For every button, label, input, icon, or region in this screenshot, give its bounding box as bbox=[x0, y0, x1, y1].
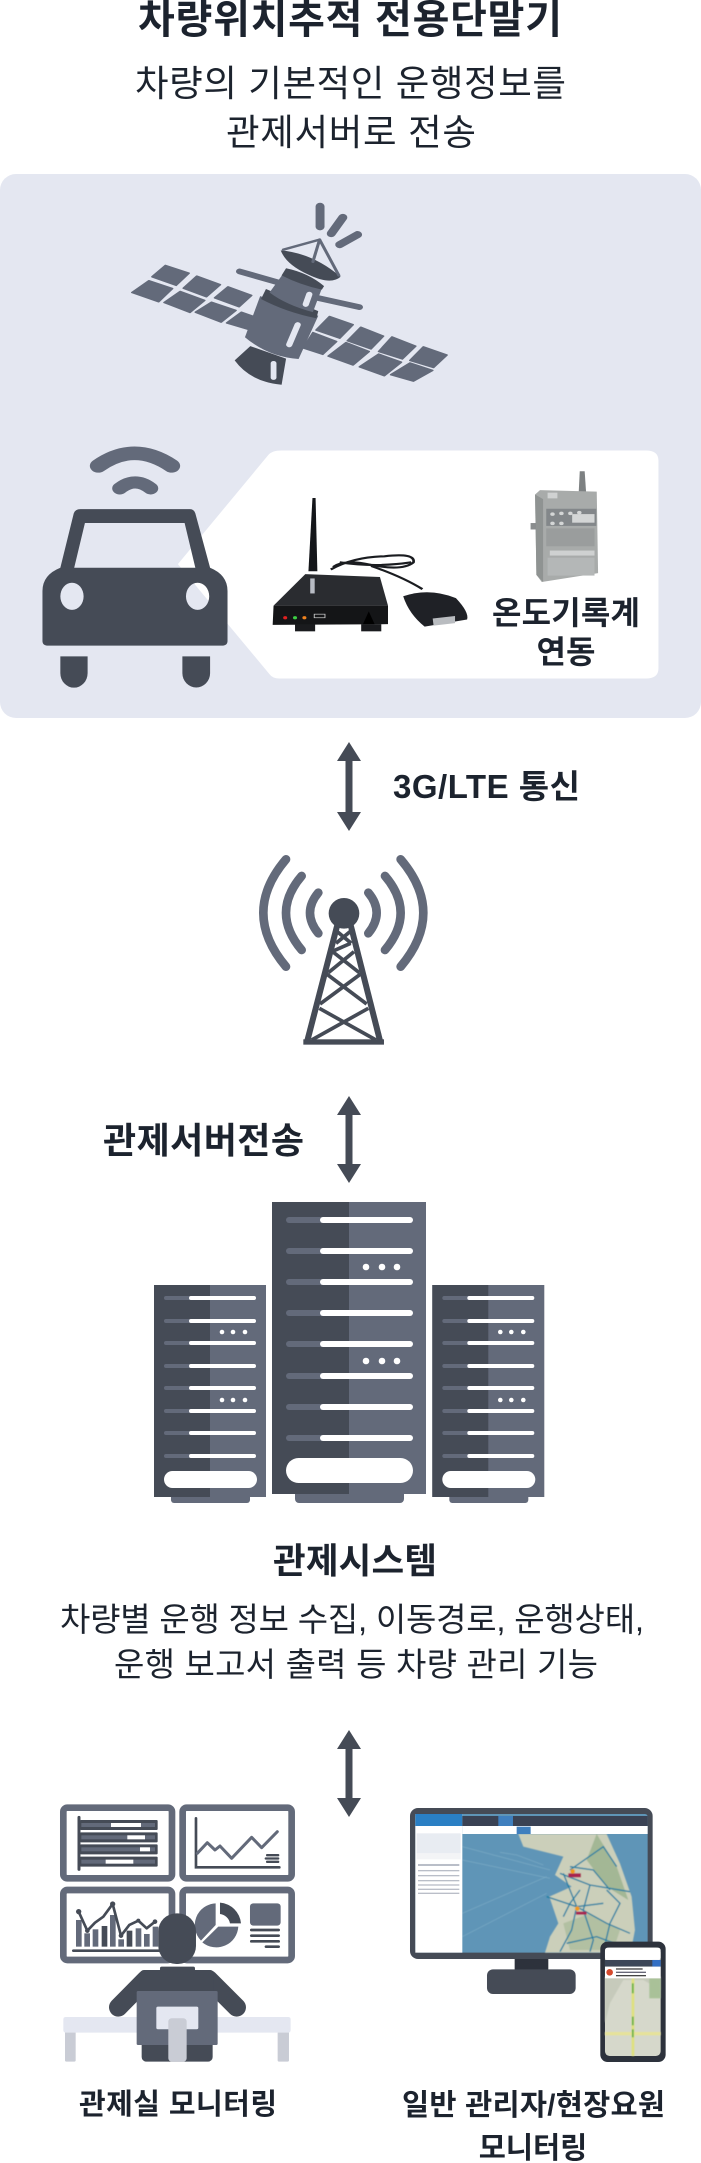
GPS terminal photo bbox=[273, 498, 467, 631]
screen: pie chart bbox=[183, 1890, 292, 1960]
server: right rack bbox=[432, 1285, 544, 1503]
label: temperature recorder link: 온도기록계 bbox=[492, 595, 640, 631]
label: 3G/LTE: 3G/LTE 통신 bbox=[393, 768, 580, 805]
subtitle: 차량의 기본적인 운행정보를 bbox=[135, 63, 566, 104]
desktop monitor bbox=[410, 1808, 653, 1994]
operator and chair bbox=[118, 1913, 237, 2062]
screen: bar list bbox=[63, 1808, 172, 1878]
callout: terminal detail bbox=[178, 450, 658, 679]
panel: vehicle terminal bbox=[0, 174, 701, 718]
icon: satellite bbox=[132, 206, 447, 385]
desk bbox=[63, 2017, 291, 2062]
text: control system description: 차량별 운행 정보 수집, 이동경로, 운행상태, bbox=[60, 1601, 644, 1638]
icon: server racks bbox=[154, 1202, 544, 1503]
icon: car bbox=[42, 509, 228, 688]
label: manager and field staff monitoring: 일반 관리자/현장요원 bbox=[402, 2089, 665, 2122]
screen: line chart bbox=[183, 1808, 292, 1878]
heading: control system: 관제시스템 bbox=[273, 1541, 437, 1581]
label: temperature recorder link: 연동 bbox=[537, 634, 595, 670]
subtitle: 관제서버로 전송 bbox=[226, 112, 476, 153]
label: server transfer: 관제서버전송 bbox=[103, 1120, 304, 1161]
icon: vehicle wifi signal bbox=[98, 453, 172, 488]
label: temperature recorder link bbox=[492, 595, 640, 670]
server: left rack bbox=[154, 1285, 266, 1503]
text: control system description bbox=[60, 1601, 644, 1683]
label: manager and field staff monitoring bbox=[402, 2089, 665, 2163]
arrow: vehicle to tower bbox=[337, 742, 361, 831]
subtitle bbox=[135, 63, 566, 153]
text: control system description: 운행 보고서 출력 등 차량 관리 기능 bbox=[114, 1646, 598, 1683]
screen: combo chart bbox=[63, 1890, 172, 1960]
server: center rack bbox=[272, 1202, 426, 1503]
temperature recorder photo bbox=[531, 471, 598, 582]
icon: radio tower bbox=[263, 859, 423, 1045]
arrow: system to monitoring bbox=[337, 1730, 361, 1817]
label: control room monitoring: 관제실 모니터링 bbox=[79, 2088, 277, 2121]
mobile phone bbox=[600, 1942, 666, 2062]
icon: control room operator bbox=[63, 1808, 292, 2062]
icon: desktop and mobile monitoring bbox=[410, 1808, 666, 2062]
arrow: tower to server bbox=[337, 1096, 361, 1183]
